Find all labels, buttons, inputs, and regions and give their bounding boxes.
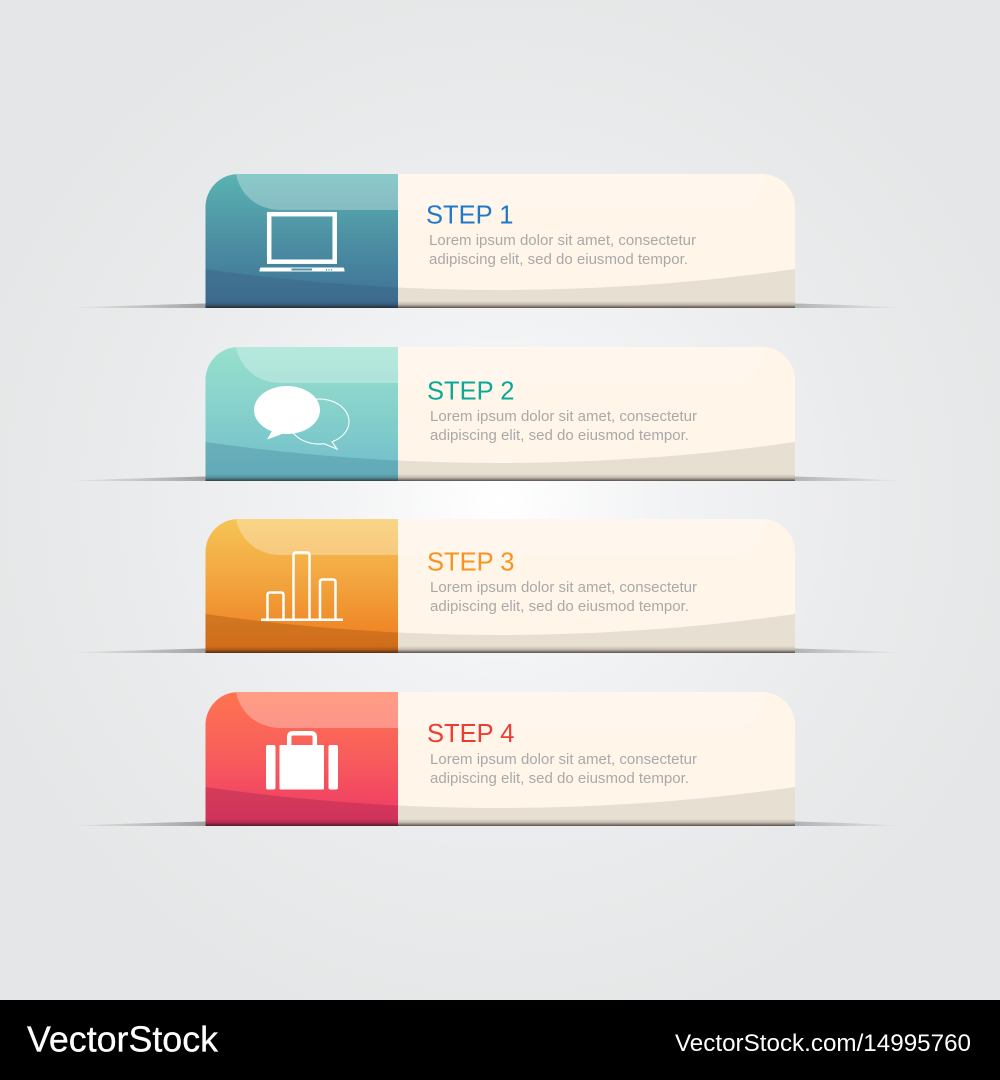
text side 4 — [398, 692, 795, 826]
panel: step 4 — [65, 692, 905, 826]
step 3 description — [430, 580, 697, 615]
text side 3 — [398, 519, 795, 653]
curved lower band 4 — [206, 787, 398, 826]
bottom edge shade 4 — [206, 819, 795, 826]
panel: step 2 — [65, 347, 905, 481]
icon: bar chart — [261, 552, 343, 620]
top gloss 2 — [236, 347, 398, 383]
icon: briefcase — [266, 733, 338, 790]
colour side 3 — [206, 519, 398, 653]
top gloss 3 — [236, 519, 398, 555]
step 1 description: Lorem ipsum dolor sit amet, consectetur — [429, 233, 696, 249]
step 4 description: Lorem ipsum dolor sit amet, consectetur — [430, 752, 697, 768]
bottom edge shade 2 — [206, 474, 795, 481]
step 4 title: STEP 4 — [427, 720, 514, 748]
curved lower band 1 — [206, 269, 398, 308]
bottom edge shade 3 — [206, 646, 795, 653]
step 2 title: STEP 2 — [427, 378, 514, 406]
step 1 title: STEP 1 — [426, 202, 513, 230]
shelf shadow 4 — [65, 822, 905, 826]
colour side 1 — [206, 174, 398, 308]
panel: step 1 — [65, 174, 905, 308]
colour side 4 — [206, 692, 398, 826]
step 1 description — [429, 233, 696, 268]
curved lower band 2 — [206, 442, 398, 481]
step 4 description — [430, 752, 697, 787]
step 3 description: Lorem ipsum dolor sit amet, consectetur — [430, 580, 697, 596]
colour side 2 — [206, 347, 398, 481]
step 2 description — [430, 409, 697, 444]
curved lower band 3 — [206, 614, 398, 653]
step 3 title: STEP 3 — [427, 548, 514, 576]
step 4 description: adipiscing elit, sed do eiusmod tempor. — [430, 771, 689, 787]
top gloss 4 — [236, 692, 398, 728]
text side 2 — [398, 347, 795, 481]
icon: laptop — [260, 214, 344, 272]
icon: speech bubbles — [254, 386, 349, 449]
step 3 description: adipiscing elit, sed do eiusmod tempor. — [430, 599, 689, 615]
panel: step 3 — [65, 519, 905, 653]
bottom edge shade 1 — [206, 301, 795, 308]
step 2 description: adipiscing elit, sed do eiusmod tempor. — [430, 428, 689, 444]
shelf shadow 2 — [65, 476, 905, 481]
footer bar — [0, 1000, 1000, 1080]
footer logo: VectorStock — [27, 1018, 219, 1060]
footer image id: VectorStock.com/14995760 — [675, 1030, 971, 1057]
top gloss 1 — [236, 174, 398, 210]
shelf shadow 3 — [65, 648, 905, 653]
step 2 description: Lorem ipsum dolor sit amet, consectetur — [430, 409, 697, 425]
step 1 description: adipiscing elit, sed do eiusmod tempor. — [429, 252, 688, 268]
shelf shadow 1 — [65, 304, 905, 308]
text side 1 — [398, 174, 795, 308]
